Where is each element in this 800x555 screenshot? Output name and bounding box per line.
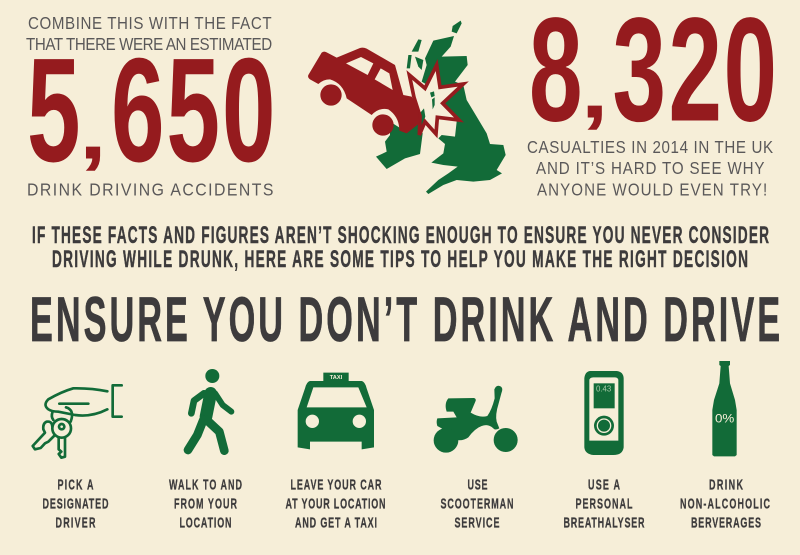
label: breathalyser: PERSONAL	[576, 495, 633, 512]
caption: casualties	[527, 137, 773, 200]
map: Great Britain and Ireland	[376, 21, 506, 194]
label: walk: FROM YOUR	[174, 495, 237, 512]
icon: hand with keys	[33, 385, 122, 458]
icon: explosion star	[409, 65, 463, 135]
label: non-alcoholic	[680, 476, 770, 531]
label: taxi: LEAVE YOUR CAR	[290, 476, 382, 493]
label: breathalyser: BREATHALYSER	[564, 514, 645, 531]
intro text: left: THAT THERE WERE AN ESTIMATED	[26, 34, 272, 54]
intro text: left	[26, 13, 272, 54]
intro text: left: COMBINE THIS WITH THE FACT	[28, 13, 272, 33]
big number: 5,650: 650	[111, 28, 275, 193]
label: designated driver: PICK A	[58, 476, 94, 493]
icon: breathalyser	[584, 371, 624, 455]
label: breathalyser	[564, 476, 645, 531]
subheading: DRIVING WHILE DRUNK, HERE ARE SOME TIPS TO HELP YOU MAKE THE RIGHT DECISION	[52, 246, 748, 273]
label: walk: WALK TO AND	[169, 476, 242, 493]
label: scooterman	[440, 476, 514, 531]
label: non-alcoholic: NON-ALCOHOLIC	[680, 495, 770, 512]
subheading	[32, 222, 769, 273]
big number: 5,650: 5	[27, 28, 80, 193]
icon: scooter	[434, 386, 518, 453]
label: designated driver	[42, 476, 109, 531]
big number: 5,650	[27, 28, 275, 193]
caption: drink driving accidents: DRINK DRIVING ACCIDENTS	[27, 180, 273, 200]
big number: 8,320: ,	[581, 46, 608, 135]
icon: crashing car	[308, 48, 419, 136]
icon: breathalyser: 0.43	[596, 384, 612, 393]
big number: 8,320	[529, 0, 777, 153]
icon: taxi	[298, 373, 374, 449]
label: scooterman: USE	[468, 476, 487, 493]
label: breathalyser: USE A	[588, 476, 620, 493]
big number: 5,650: ,	[79, 87, 107, 176]
label: walk	[169, 476, 242, 531]
label: designated driver: DESIGNATED	[42, 495, 109, 512]
label: taxi	[286, 476, 386, 531]
title: ENSURE YOU DON’T DRINK AND DRIVE	[30, 284, 780, 355]
label: taxi: AND GET A TAXI	[295, 514, 377, 531]
caption: casualties: AND IT’S HARD TO SEE WHY	[536, 158, 764, 178]
caption: casualties: ANYONE WOULD EVEN TRY!	[537, 179, 767, 200]
caption: casualties: CASUALTIES IN 2014 IN THE UK	[527, 137, 773, 157]
icon: walking person	[188, 369, 231, 451]
label: walk: LOCATION	[180, 514, 232, 531]
label: scooterman: SCOOTERMAN	[440, 495, 514, 512]
icon: taxi: TAXI	[330, 375, 343, 381]
icon: bottle: 0%	[715, 411, 734, 425]
subheading: IF THESE FACTS AND FIGURES AREN’T SHOCKING ENOUGH TO ENSURE YOU NEVER CONSIDER	[32, 222, 769, 249]
label: non-alcoholic: DRINK	[709, 476, 743, 493]
map with crashing car	[308, 21, 506, 194]
icon: bottle	[712, 361, 737, 456]
label: designated driver: DRIVER	[56, 514, 96, 531]
label: taxi: AT YOUR LOCATION	[286, 495, 386, 512]
label: non-alcoholic: BERVERAGES	[691, 514, 761, 531]
label: scooterman: SERVICE	[454, 514, 499, 531]
